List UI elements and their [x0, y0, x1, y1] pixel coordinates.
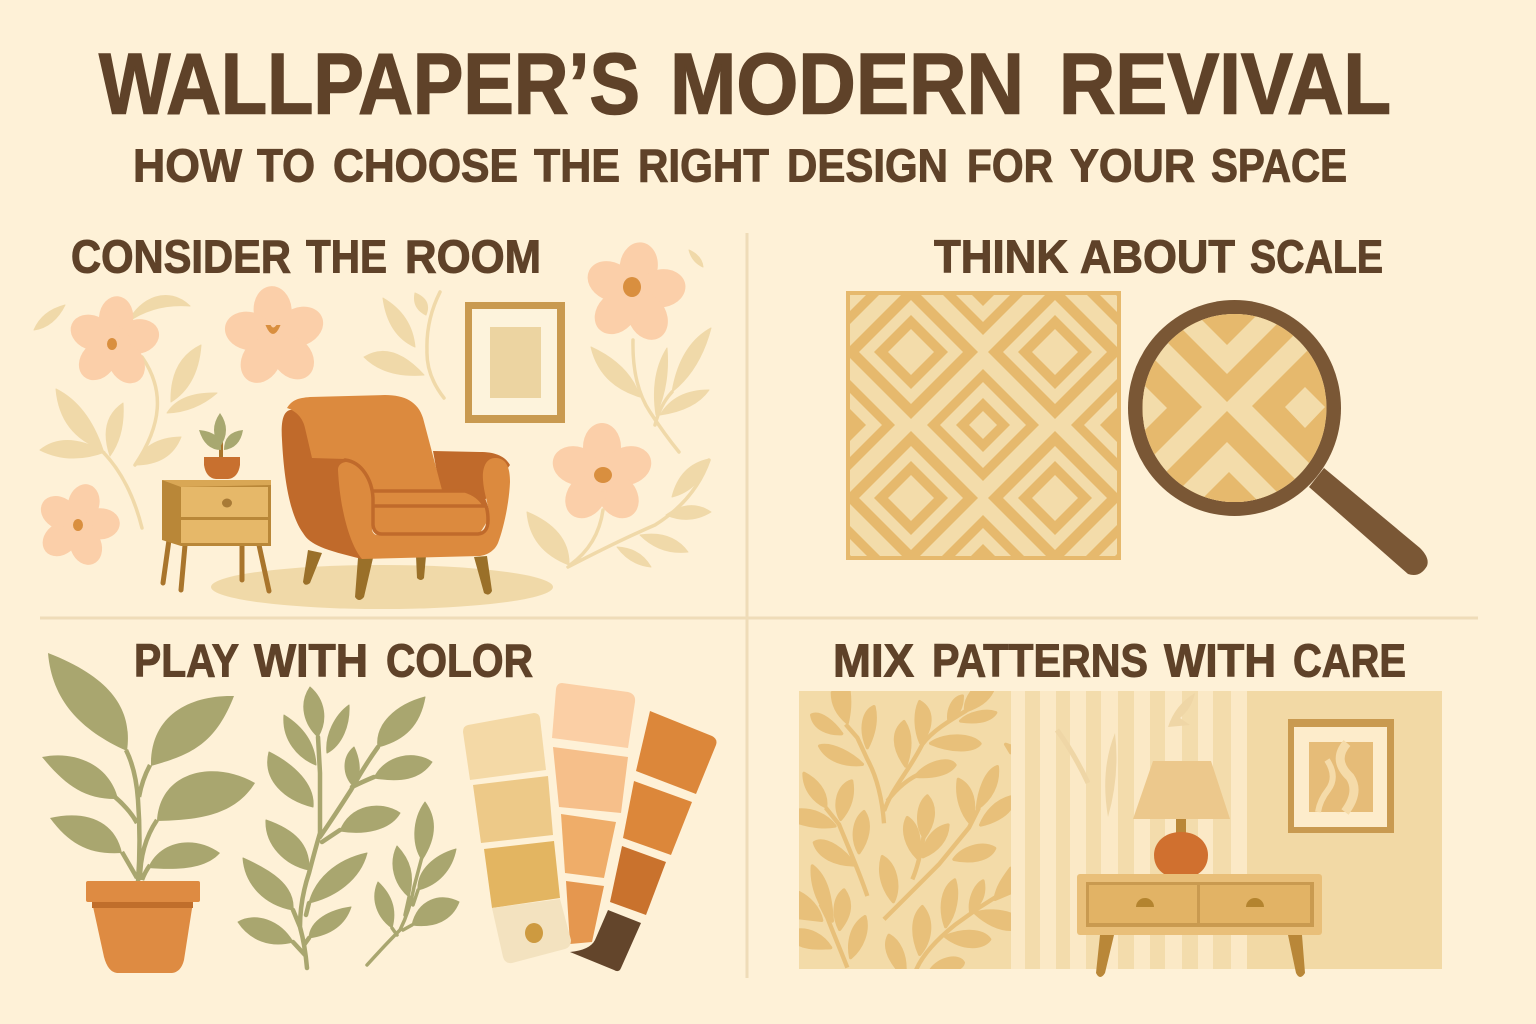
subtitle [133, 140, 1347, 192]
flowers [24, 235, 696, 578]
swatch: yellow strip [463, 713, 571, 963]
framed art [1288, 719, 1394, 833]
heading: mix patterns with care: MIX [833, 634, 914, 686]
subtitle: CHOOSE [333, 140, 518, 192]
heading: consider the room [71, 230, 541, 282]
subtitle: DESIGN [787, 140, 948, 192]
paint swatch fan [463, 683, 716, 971]
geometric wallpaper swatch [846, 291, 1121, 560]
panel: think about scale [846, 240, 1428, 575]
heading: consider the room: THE [306, 230, 387, 282]
leafy sprig [238, 687, 432, 968]
heading: think about scale: ABOUT [1080, 230, 1235, 282]
heading: mix patterns with care: CARE [1293, 634, 1406, 686]
subtitle: THE [534, 140, 620, 192]
wallpaper leaves [34, 250, 711, 567]
wallpaper: striped section [1011, 691, 1247, 969]
subtitle: HOW [133, 140, 243, 192]
panel: consider the room [24, 230, 711, 609]
heading: mix patterns with care: PATTERNS [932, 634, 1148, 686]
subtitle: SPACE [1211, 140, 1347, 192]
heading: play with color: PLAY [134, 634, 239, 686]
console table [1077, 874, 1322, 977]
swatch: peach strip [552, 683, 635, 944]
heading: think about scale: SCALE [1250, 230, 1383, 282]
heading: play with color [134, 634, 533, 686]
title: MODERN [670, 36, 1024, 132]
heading: think about scale: THINK [934, 230, 1068, 282]
subtitle: YOUR [1070, 140, 1195, 192]
heading: consider the room: ROOM [405, 230, 541, 282]
subtitle: RIGHT [638, 140, 769, 192]
title [99, 36, 1391, 132]
wallpaper: plain section [1247, 691, 1442, 969]
small sprig [367, 802, 459, 965]
icon: magnifying glass [1128, 300, 1428, 575]
side table with plant [162, 413, 271, 591]
heading: mix patterns with care [833, 634, 1406, 686]
panel: play with color [42, 634, 716, 973]
subtitle: FOR [967, 140, 1053, 192]
heading: play with color: WITH [254, 634, 368, 686]
framed picture [465, 302, 565, 423]
wallpaper: botanical section [799, 691, 1011, 971]
heading: play with color: COLOR [386, 634, 533, 686]
title: REVIVAL [1059, 36, 1391, 132]
armchair [282, 395, 510, 600]
heading: think about scale [934, 230, 1383, 282]
heading: consider the room: CONSIDER [71, 230, 291, 282]
table lamp [1133, 761, 1230, 874]
rug [211, 565, 553, 609]
swatch: terracotta strip [570, 711, 716, 971]
title: WALLPAPER’S [99, 36, 640, 132]
potted plant [42, 653, 255, 973]
subtitle: TO [257, 140, 315, 192]
panel: mix patterns with care [799, 634, 1442, 977]
heading: mix patterns with care: WITH [1164, 634, 1276, 686]
